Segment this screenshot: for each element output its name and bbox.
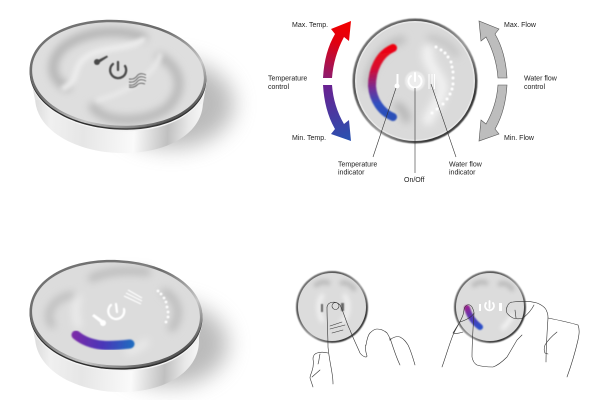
leader lines (373, 84, 456, 173)
grooves (368, 38, 456, 120)
water flow dots (430, 46, 454, 114)
labels: indicators (338, 162, 483, 184)
labels: temperature: Max. Temp. (292, 22, 328, 29)
labels: temperature (268, 22, 328, 142)
icon: water flow (129, 74, 146, 87)
labels: temperature: Temperature (268, 76, 307, 82)
labels: water flow: Water flow (524, 76, 558, 82)
grooves (53, 32, 179, 120)
icon: power button (405, 71, 425, 91)
labels: water flow: control (524, 84, 545, 91)
device: bottom-left product photo (27, 256, 228, 396)
labels: indicators: Water flow (449, 162, 483, 168)
device: top-left product photo (26, 14, 234, 157)
icon: hand outline (310, 302, 415, 387)
labels: indicators: On/Off (404, 177, 425, 184)
grooves (474, 282, 512, 328)
water flow dots (157, 290, 169, 323)
icon: power button (110, 62, 126, 78)
device: fingers rotate on ring (442, 271, 579, 377)
labels: temperature: Min. Temp. (292, 135, 326, 142)
arrow: flow down (479, 85, 507, 141)
icon: thermometer (92, 314, 106, 326)
temperature bar (372, 48, 393, 117)
icon: water flow (124, 290, 142, 304)
labels: indicators: indicator (338, 170, 365, 176)
temperature bar (76, 335, 130, 345)
device: control diagram dial (352, 18, 478, 144)
icons (479, 303, 502, 311)
icon: power button (108, 304, 124, 319)
labels: water flow: Max. Flow (504, 22, 537, 29)
arrow: temperature down (323, 85, 351, 141)
icon: thermometer (94, 56, 108, 65)
icon: hand outline (442, 301, 579, 377)
device: finger press on power (296, 271, 415, 387)
labels: indicators: Temperature (338, 162, 377, 168)
grooves (316, 282, 354, 322)
icon: water flow (429, 74, 434, 89)
labels: water flow: Min. Flow (504, 135, 535, 142)
icon: power button (485, 301, 494, 310)
arrow: temperature up (323, 21, 351, 78)
labels: indicators: indicator (449, 170, 476, 176)
grooves (49, 271, 178, 352)
labels: temperature: control (268, 84, 289, 91)
arrow: flow up (479, 21, 507, 78)
temperature bar (467, 308, 480, 327)
labels: water flow (504, 22, 558, 142)
icons (321, 303, 344, 312)
icon: thermometer (394, 74, 400, 88)
